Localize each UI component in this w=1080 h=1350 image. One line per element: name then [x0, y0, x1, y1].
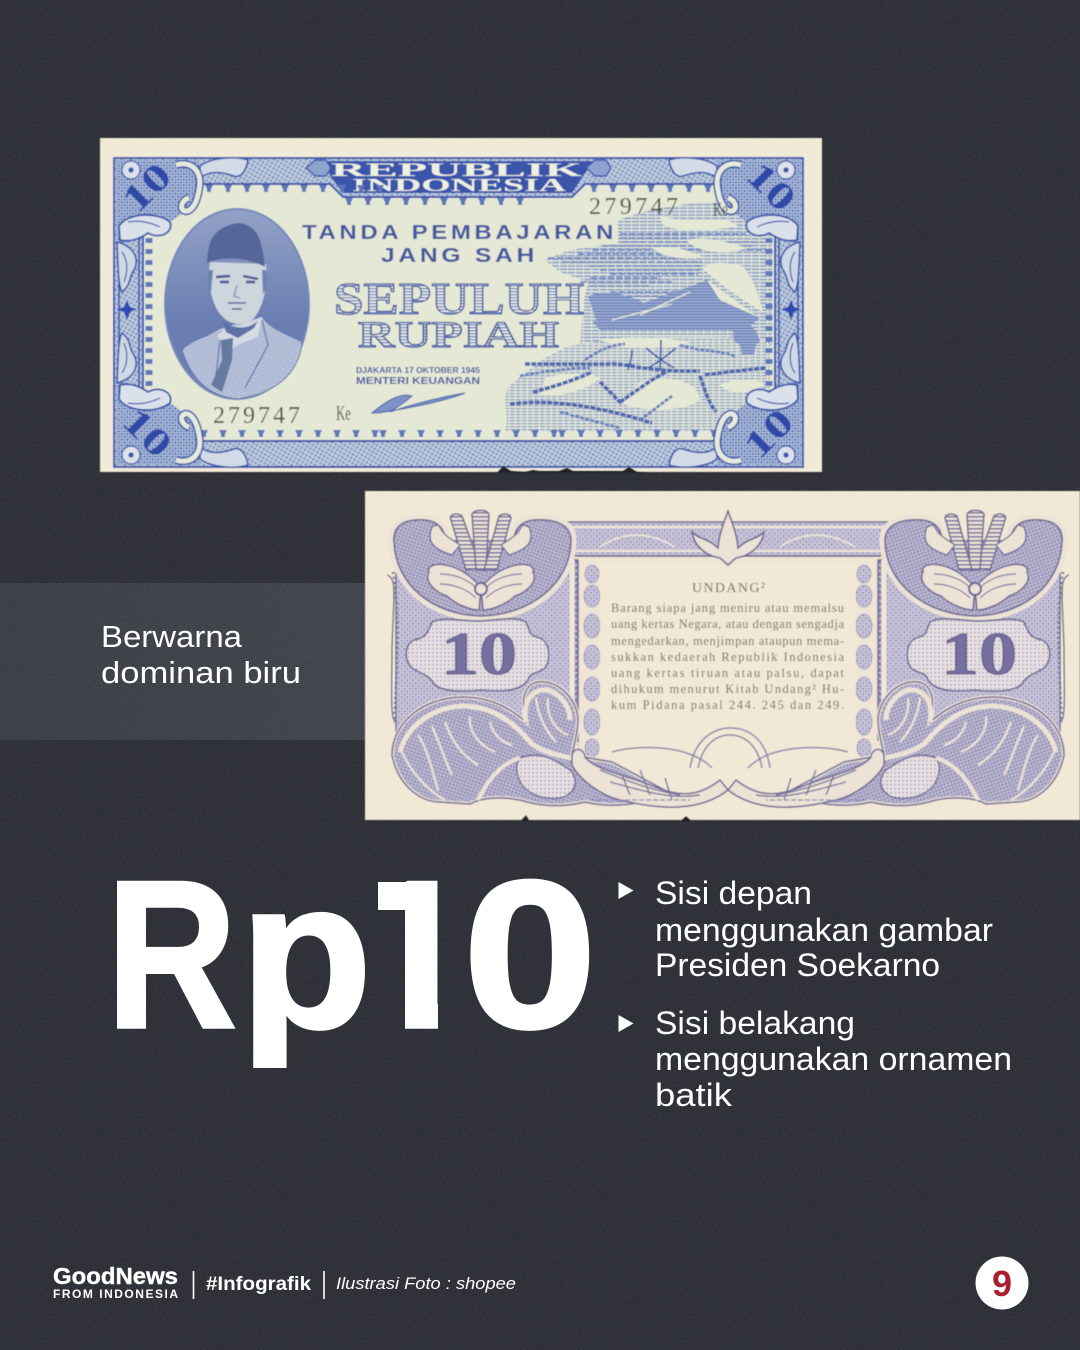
law text: UNDANG²	[692, 581, 765, 596]
trees	[733, 324, 760, 355]
serial numbers: 279747	[213, 403, 300, 429]
footer credit: Ilustrasi Foto : shopee	[336, 1274, 516, 1293]
heading: Republik Indonesia: REPUBLIK	[331, 160, 583, 181]
numerals on back	[441, 621, 1017, 687]
corner numerals	[114, 154, 804, 467]
law text: sukkan kedaerah Republik Indonesia	[611, 650, 844, 664]
pale fields	[540, 337, 765, 410]
value: sepuluh rupiah: RUPIAH	[358, 315, 559, 356]
corner numerals: 10	[738, 154, 804, 220]
caption	[101, 620, 301, 690]
page number badge: 9	[992, 1263, 1012, 1304]
side band behind caption	[0, 583, 365, 740]
date and ministry: DJAKARTA 17 OKTOBER 1945	[356, 365, 480, 375]
banknote back	[365, 466, 1080, 821]
distant ridge	[588, 293, 650, 320]
bullet text 1: Sisi depan	[655, 875, 812, 911]
border beads	[200, 185, 769, 437]
caption: dominan biru	[101, 656, 301, 690]
serial numbers	[213, 194, 728, 429]
page number badge	[976, 1256, 1028, 1310]
law text: kum Pidana pasal 244. 245 dan 249.	[611, 698, 844, 712]
bullet text 2: batik	[655, 1077, 733, 1113]
clouds	[652, 216, 763, 312]
big title: Rp10	[117, 878, 590, 1068]
value: sepuluh rupiah	[334, 273, 584, 356]
vertical beads	[149, 238, 769, 398]
banner diamonds	[306, 160, 611, 176]
paper	[365, 491, 1080, 820]
main note text	[302, 222, 617, 267]
title text: 1	[357, 837, 475, 1072]
banknote front	[100, 138, 822, 472]
top centre ornament	[692, 511, 764, 565]
law text: mengedarkan, menjimpan ataupun mema-	[611, 634, 844, 648]
title text: p	[240, 837, 372, 1072]
corner numerals: 10	[736, 401, 802, 467]
bullet text 2: Sisi belakang	[655, 1005, 855, 1041]
law text: uang kertas Negara, atau dengan sengadja	[611, 617, 844, 631]
title numeral flag	[378, 882, 408, 910]
footer dividers	[194, 1271, 324, 1299]
terrace banks	[510, 364, 766, 423]
footer hashtag: #Infografik	[206, 1274, 311, 1295]
text panel frame	[575, 558, 883, 790]
paper tear marks	[497, 466, 692, 821]
law text	[611, 581, 845, 712]
paper	[100, 138, 822, 472]
heading: Republik Indonesia: INDONESIA	[352, 175, 566, 195]
bullet text 2: menggunakan ornamen	[655, 1041, 1012, 1077]
palm	[628, 340, 676, 370]
title text: R	[106, 837, 236, 1072]
top ornamental band	[565, 522, 892, 556]
terrace ground	[505, 337, 770, 432]
bottom centre arcs	[612, 728, 848, 768]
footer logo: FROM INDONESIA	[53, 1287, 178, 1301]
corner scrolls	[116, 158, 801, 467]
portrait of Soekarno	[165, 209, 309, 399]
date and ministry: MENTERI KEUANGAN	[356, 376, 480, 387]
volcano	[593, 280, 760, 330]
darker sky bands	[548, 234, 766, 300]
numerals on back: 10	[941, 621, 1017, 687]
corner numerals: 10	[114, 400, 180, 466]
note border	[114, 158, 803, 467]
footer logo: GoodNews	[53, 1263, 178, 1289]
main note text: TANDA PEMBAJARAN	[302, 222, 617, 244]
bullet text 1: menggunakan gambar	[655, 912, 993, 948]
serial numbers: 279747	[589, 194, 678, 220]
bullet text 1: Presiden Soekarno	[655, 947, 940, 983]
border stars	[117, 300, 801, 320]
law text: dihukum menurut Kitab Undang² Hu-	[611, 682, 844, 696]
bullet text 2	[655, 1005, 1012, 1113]
right ornament	[728, 510, 1069, 807]
law text: uang kertas tiruan atau palsu, dapat	[611, 666, 845, 680]
chains	[584, 565, 872, 757]
serial numbers: Ke	[336, 401, 351, 425]
signature	[372, 393, 465, 413]
text panel	[600, 562, 856, 787]
note field	[114, 158, 803, 467]
date and ministry	[356, 365, 480, 387]
left ornament	[387, 510, 728, 807]
main note text: JANG SAH	[381, 245, 538, 267]
serial numbers: Ke	[713, 199, 728, 221]
bullet icon 1	[618, 882, 634, 899]
top banner	[325, 161, 592, 193]
heading: Republik Indonesia	[331, 160, 583, 195]
value: sepuluh rupiah: SEPULUH	[334, 273, 584, 324]
bullet text 1	[655, 875, 993, 983]
caption: Berwarna	[101, 620, 242, 654]
law text: Barang siapa jang meniru atau memalsu	[611, 601, 845, 615]
bullet icon 2	[618, 1015, 634, 1032]
left and right border rails	[119, 163, 798, 462]
numerals on back: 10	[441, 621, 517, 687]
footer logo	[53, 1263, 178, 1301]
title text: 0	[463, 837, 597, 1072]
frame lines	[578, 556, 880, 745]
corner numerals: 10	[114, 155, 180, 221]
landscape	[505, 202, 772, 432]
sky	[545, 202, 772, 345]
